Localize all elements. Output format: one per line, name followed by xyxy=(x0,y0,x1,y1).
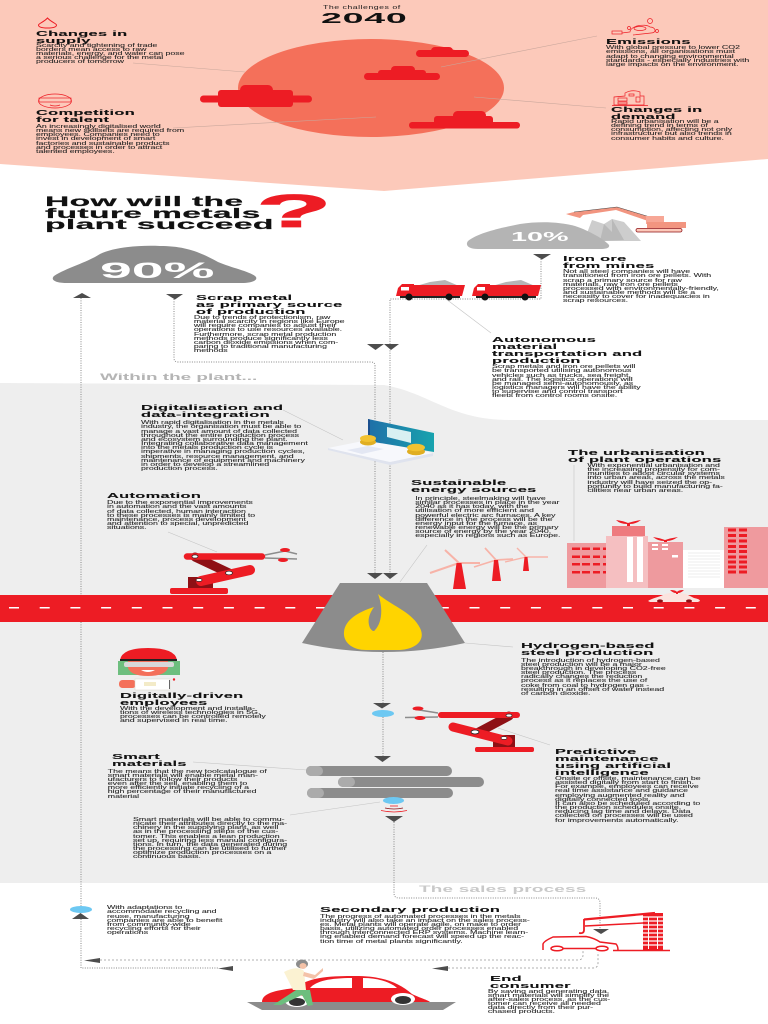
text block: digitalisation: maintenance of equipment and machinery xyxy=(141,458,305,464)
text block: scrap metal: carbon dioxide emissions when com- xyxy=(194,340,338,346)
text block: sustainable energy: utilisation of more efficient and xyxy=(415,508,534,514)
heading: how will the future metals plant succeed: How will the xyxy=(45,193,243,209)
text block: predictive maintenance: For example, employees can receive xyxy=(555,784,699,790)
illustration: furnace xyxy=(302,583,465,652)
text block: hydrogen: radically changes the reduction xyxy=(521,674,642,680)
text block: scrap metal: Due to trends of protectionism, raw xyxy=(194,315,330,321)
text block: autonomous transportation: be transported utilising autonomous xyxy=(492,368,631,374)
text block: digitalisation: Integrating collaborative data management xyxy=(141,441,308,447)
text block: changes in demand: consumer habits and culture. xyxy=(611,136,724,142)
text block: competition for talent xyxy=(36,108,184,155)
text block: automation: Automation xyxy=(107,490,201,500)
callout lines xyxy=(133,36,606,128)
text block: iron ore from mines: scrap a primary source for raw xyxy=(563,278,682,284)
text block: end consumer: after-sales process, as the cus- xyxy=(488,997,610,1003)
text block: changes in demand: demand xyxy=(611,112,676,120)
text block: hydrogen: The introduction of hydrogen-based xyxy=(521,658,660,664)
icon: blue disc three xyxy=(70,906,92,913)
text block: scrap metal: will require companies to adjust their xyxy=(194,323,336,329)
text block: sustainable energy: energy sources xyxy=(411,484,537,494)
text block: predictive maintenance xyxy=(555,746,701,824)
text block: sustainable energy: source of energy by the year 2040, xyxy=(415,529,551,535)
text block: hydrogen: steel production. The process xyxy=(521,670,636,676)
text block: autonomous transportation: Scrap metals and iron ore pellets will xyxy=(492,364,635,370)
text block: digitally-driven employees: employees xyxy=(120,698,208,706)
label: 90 percent: 90% xyxy=(100,258,215,283)
text block: iron ore from mines: materials, raw iron ore pellets xyxy=(563,282,678,288)
text block: secondary production: industry will also take an impact on the sales process- xyxy=(320,918,530,924)
text block: digitally-driven employees xyxy=(120,690,266,724)
text block: iron ore from mines xyxy=(563,254,719,304)
text block: predictive maintenance: real time assistance and guidance xyxy=(555,788,688,794)
text block: competition for talent: An increasingly digitalised world xyxy=(36,124,161,130)
icon: wind turbine large xyxy=(430,550,480,589)
chart: central sphere xyxy=(238,39,504,137)
text block: digitalisation: imperative in managing production cycles, xyxy=(141,449,305,455)
text block: changes in supply: Scarcity and tightening of trade xyxy=(36,43,157,49)
text block: automation: to these processes is mainly limited to xyxy=(107,513,255,519)
text block: digitalisation: With rapid digitalisation in the metals xyxy=(141,420,284,426)
title: 2040: 2040 xyxy=(321,10,407,27)
text block: competition for talent: employees. Companies need to xyxy=(36,132,160,138)
text block: urbanisation: industry will have seized the op- xyxy=(587,480,712,486)
text block: predictive maintenance: assisted digitally from start to finish. xyxy=(555,780,694,786)
text block: urbanisation: With exponential urbanisation and xyxy=(587,463,720,469)
text block: sustainable energy: energy input for the furnace, as xyxy=(415,521,537,527)
icon: rocks xyxy=(584,219,641,241)
text block: changes in supply: producers of tomorrow xyxy=(36,59,124,65)
text block: digitally-driven employees: tions of wireless technologies in 5G, xyxy=(120,710,260,716)
icon: cloud left xyxy=(200,85,312,107)
text block: changes in supply: a serious challenge for the metal xyxy=(36,55,163,61)
icon: robot arm right xyxy=(405,706,534,752)
icon: car outline xyxy=(543,936,618,951)
text block: hydrogen: coke from coal to hydrogen gas - xyxy=(521,683,649,689)
text block: hydrogen: steel production xyxy=(521,648,654,656)
text block: predictive maintenance: intelligence xyxy=(555,768,649,776)
text block: predictive maintenance: It can also be scheduled according to xyxy=(555,801,700,807)
text block: scrap metal: material scarcity in regions like Europe xyxy=(194,319,345,325)
text block: iron ore from mines: scrap resources. xyxy=(563,298,628,304)
heading: within the plant: Within the plant... xyxy=(100,372,257,382)
icon: flame xyxy=(344,594,422,650)
text block: emissions xyxy=(606,36,749,68)
text block: automation: and attention to special, unpredicted xyxy=(107,521,248,527)
text block: scrap metal: methods xyxy=(194,348,228,354)
text block: recycling: companies are able to benefit xyxy=(107,918,222,924)
text block: scrap metal: as primary source xyxy=(196,300,343,308)
icon: signal waves xyxy=(381,806,407,812)
panel: within the plant background xyxy=(0,383,768,883)
text block: secondary production: The progress of automated processes in the metals xyxy=(320,914,521,920)
text block: emissions: Emissions xyxy=(606,36,691,46)
text block: digitally-driven employees: processes can be controlled remotely xyxy=(120,714,266,720)
text block: digitalisation: throughout the entire production process xyxy=(141,433,299,439)
text block: urbanisation xyxy=(568,448,725,494)
text block: urbanisation: cilities near urban areas. xyxy=(587,488,683,494)
text block: autonomous transportation: production xyxy=(492,356,581,364)
text block: automation: Due to the exponential improvements xyxy=(107,500,253,506)
text block: competition for talent: and processes in order to attract xyxy=(36,145,162,151)
text block: secondary production: tion time of metal plants significantly. xyxy=(320,939,463,945)
text block: autonomous transportation xyxy=(492,334,642,399)
text block: iron ore from mines: transitioned from iron ore pellets. With xyxy=(563,273,711,279)
icon: car on road xyxy=(648,590,700,603)
text block: iron ore from mines: processed with environmentally-friendly, xyxy=(563,286,719,292)
icon: secondary production factory xyxy=(579,913,670,951)
text block: urbanisation: into urban areas, across the metals xyxy=(587,475,725,481)
text block: autonomous transportation: fleets from control rooms onsite. xyxy=(492,393,617,399)
text block: secondary production: ing enabled demand forecast will speed up the reac- xyxy=(320,934,524,940)
text block: urbanisation: munities to adopt circular systems xyxy=(587,471,720,477)
text block: digitally-driven employees: and supervised in real time. xyxy=(120,718,228,724)
text block: sustainable energy: In principle, steelmaking will have xyxy=(415,496,546,502)
text block: competition for talent: means new skillsets are required from xyxy=(36,128,184,134)
text block: competition for talent: Competition xyxy=(36,108,135,116)
text block: end consumer: data directly from their pur- xyxy=(488,1005,593,1011)
text block: emissions: standards - especially industries with xyxy=(606,58,749,64)
callout lines inside plant xyxy=(168,299,574,815)
text block: iron ore from mines: Not all steel companies will have xyxy=(563,269,690,275)
icon: question mark: ? xyxy=(256,185,332,237)
icon: cloud lower right xyxy=(409,111,520,128)
text block: sustainable energy: similar processes in place in the year xyxy=(415,500,560,506)
text block: end consumer: smart materials will simplify the xyxy=(488,993,609,999)
text block: changes in supply: materials, energy, and water can pose xyxy=(36,51,185,57)
text block: iron ore from mines: Iron ore xyxy=(563,254,627,262)
text block: digitalisation: data-integration xyxy=(141,410,270,418)
text block: recycling: recycling efforts for their xyxy=(107,926,201,932)
text block: scrap metal: paring to traditional manufacturing xyxy=(194,344,327,350)
icon: laptop xyxy=(328,419,434,465)
text block: scrap metal: of production xyxy=(196,306,306,316)
text block: competition for talent: invest in development of smart xyxy=(36,136,155,142)
arrows xyxy=(72,254,551,971)
text block: smart materials: high percentage of their manufactured xyxy=(108,789,257,795)
icon: cloud upper right xyxy=(416,47,469,57)
text block: smart materials communication: the processing can be utilised to further xyxy=(133,846,287,852)
text block: digitalisation: and ecosystem surrounding the plant. xyxy=(141,437,288,443)
text block: digitalisation: industry, the organisation must be able to xyxy=(141,424,301,430)
text block: autonomous transportation: transportation and xyxy=(492,348,642,358)
illustration: metal pipes xyxy=(306,766,484,798)
icon: truck one xyxy=(396,280,465,300)
text block: automation: maintenance, process development xyxy=(107,517,246,523)
text block: automation: of data collected, human interaction xyxy=(107,509,246,515)
text block: sustainable energy: especially in regions such as Europe. xyxy=(415,533,560,539)
text block: iron ore from mines: necessity to cover for inadequacies in xyxy=(563,294,710,300)
text block: sustainable energy: difference in the process will be the xyxy=(415,517,553,523)
title: challenges of: The challenges of xyxy=(323,5,401,11)
illustration: city buildings xyxy=(567,520,768,588)
text block: emissions: adapt to changing environmental xyxy=(606,54,734,60)
text block: hydrogen: resulting in an offset of water instead xyxy=(521,687,664,693)
icon: wind turbine small xyxy=(505,548,548,571)
text block: secondary production xyxy=(320,904,530,945)
text block: digitalisation xyxy=(141,402,308,472)
text block: autonomous transportation: Autonomous xyxy=(492,334,596,344)
text block: smart materials communication: tions. In turn, the data generated during xyxy=(133,842,287,848)
text block: scrap metal xyxy=(194,292,345,354)
text block: autonomous transportation: be managed semi-autonomously, as xyxy=(492,381,633,387)
text block: end consumer: By saving and generating data, xyxy=(488,989,609,995)
text block: recycling: accommodate recycling and xyxy=(107,909,217,915)
text block: autonomous transportation: material xyxy=(492,342,557,350)
text block: hydrogen: steel production will be a major xyxy=(521,662,642,668)
text block: end consumer: consumer xyxy=(490,980,571,990)
text block: smart materials: smart materials will enable metal man- xyxy=(108,773,258,779)
text block: recycling: With adaptations to xyxy=(107,905,182,911)
text block: recycling xyxy=(107,905,222,936)
text block: urbanisation: The urbanisation xyxy=(568,448,705,456)
heading: how will the future metals plant succeed: future metals xyxy=(45,205,261,221)
icon: blue disc two xyxy=(383,797,404,804)
text block: secondary production: through interconnected ERP systems. Machine learn- xyxy=(320,930,528,936)
text block: changes in demand: infrastructure but also trends in xyxy=(611,131,732,137)
text block: iron ore from mines: from mines xyxy=(563,260,655,270)
label: 10 percent: 10% xyxy=(511,230,569,244)
text block: digitally-driven employees: Digitally-driven xyxy=(120,690,243,700)
text block: autonomous transportation: logistics managers will have the ability xyxy=(492,385,641,391)
text block: urbanisation: the increasing propensity for com- xyxy=(587,467,720,473)
text block: predictive maintenance: collected on processes will be used xyxy=(555,813,693,819)
text block: digitalisation: production process. xyxy=(141,466,218,472)
text block: urbanisation: portunity to build manufacturing fa- xyxy=(587,484,723,490)
text block: predictive maintenance: maintenance xyxy=(555,754,659,762)
text block: competition for talent: factories and sustainable products xyxy=(36,141,170,147)
text block: secondary production: basis, utilizing automated order processes enabled xyxy=(320,926,518,932)
icon: helmet face xyxy=(38,94,72,108)
text block: smart materials communication xyxy=(133,817,287,860)
flow line: recycling up xyxy=(81,298,218,968)
text block: predictive maintenance: Onsite or offsite, maintenance can be xyxy=(555,776,701,782)
text block: digitally-driven employees: With the development and installa- xyxy=(120,706,255,712)
text block: hydrogen xyxy=(521,640,666,697)
icon: employee xyxy=(118,648,180,690)
text block: secondary production: es. Metal plants will operate agile, on make to order xyxy=(320,922,521,928)
text block: sustainable energy: renewable energy will be the primary xyxy=(415,525,559,531)
text block: competition for talent: talented employees. xyxy=(36,149,115,155)
text block: smart materials: even after the sell, enabling them to xyxy=(108,781,247,787)
text block: changes in supply: Changes in xyxy=(36,28,128,38)
text block: sustainable energy: 2040 as it has today, with the xyxy=(415,504,529,510)
text block: digitalisation: shipments, resource management, and xyxy=(141,454,294,460)
text block: autonomous transportation: vehicles such as trucks, sea freight, xyxy=(492,373,631,379)
text block: changes in supply: supply xyxy=(36,36,91,44)
text block: smart materials: more efficiently initiate recycling of a xyxy=(108,785,249,791)
text block: smart materials communication: optimize production processes on a xyxy=(133,850,271,856)
icon: water drop xyxy=(38,18,56,28)
text block: changes in supply: borders mean access to raw xyxy=(36,47,147,53)
text block: smart materials xyxy=(108,752,267,800)
text block: sustainable energy: powerful electric arc furnaces. A key xyxy=(415,513,556,519)
text block: hydrogen: Hydrogen-based xyxy=(521,640,655,650)
icon: cloud centre xyxy=(364,66,440,80)
icon: truck two xyxy=(472,280,541,300)
text block: automation: situations. xyxy=(107,525,147,531)
text block: sustainable energy: Sustainable xyxy=(411,478,506,486)
text block: smart materials communication: continuous basis. xyxy=(133,854,201,860)
illustration: red car xyxy=(247,976,456,1010)
text block: hydrogen: process as it replaces the use of xyxy=(521,678,647,684)
text block: smart materials: The means that the new toolcatalogue of xyxy=(108,769,267,775)
text block: smart materials communication: set up, requiring less manual configura- xyxy=(133,838,287,844)
text block: changes in demand: Rapid urbanisation will be a xyxy=(611,119,719,125)
heading: how will the future metals plant succeed: plant succeed xyxy=(45,216,274,232)
text block: smart materials: material xyxy=(108,794,139,800)
text block: hydrogen: of carbon dioxide. xyxy=(521,691,590,697)
text block: competition for talent: for talent xyxy=(36,114,109,124)
text block: secondary production: Secondary production xyxy=(320,904,500,914)
text block: recycling: reuse, manufacturing xyxy=(107,914,190,920)
text block: digitalisation: in order to develop a streamlined xyxy=(141,462,269,468)
text block: predictive maintenance: using artificial xyxy=(555,760,671,770)
text block: recycling: from community-wide xyxy=(107,922,191,928)
icon: ninety percent pile xyxy=(53,246,256,283)
icon: robot arm left xyxy=(170,548,297,594)
text block: scrap metal: Furthermore, scrap metal production xyxy=(194,332,336,338)
text block: predictive maintenance: the production schedules onsite, xyxy=(555,805,681,811)
icon: emissions xyxy=(612,18,658,35)
text block: recycling: operations xyxy=(107,930,148,936)
text block: scrap metal: Scrap metal xyxy=(196,292,292,302)
text block: smart materials communication: Smart materials will be able to commu- xyxy=(133,817,285,823)
icon: blue disc one xyxy=(372,710,394,717)
text block: predictive maintenance: digitally connected tools. xyxy=(555,797,651,803)
text block: smart materials communication: chinery in the supplying plant, as well xyxy=(133,825,278,831)
icon: ten percent pile xyxy=(467,222,609,249)
text block: predictive maintenance: employing augmented reality and xyxy=(555,793,685,799)
text block: smart materials: Smart xyxy=(112,752,160,760)
text block: smart materials: ufacturers to follow their products xyxy=(108,777,237,783)
flow line: sales return xyxy=(100,951,598,968)
text block: changes in demand: consumption, affecting not only xyxy=(611,127,732,133)
flow line: iron ore to plant xyxy=(390,259,541,573)
text block: scrap metal: operations to use resources available. xyxy=(194,327,342,333)
text block: end consumer: End xyxy=(490,974,522,982)
text block: predictive maintenance: Predictive xyxy=(555,746,637,756)
text block: smart materials communication: as in the processing steps of the cus- xyxy=(133,829,278,835)
icon: excavator xyxy=(566,207,686,232)
icon: demand buildings xyxy=(612,91,648,106)
text block: automation xyxy=(107,490,255,531)
illustration: road xyxy=(0,595,768,622)
text block: predictive maintenance: for improvements automatically. xyxy=(555,818,679,824)
flow line: scrap to plant xyxy=(174,299,375,573)
text block: hydrogen: breakthrough in developing CO2-free xyxy=(521,666,666,672)
text block: end consumer: chased products. xyxy=(488,1009,555,1015)
text block: digitalisation: into the metals production cycle is xyxy=(141,445,273,451)
icon: production arrow xyxy=(593,929,609,934)
text block: digitalisation: Digitalisation and xyxy=(141,402,283,412)
text block: smart materials communication: tomer. This enables a lean production xyxy=(133,834,280,840)
text block: autonomous transportation: to supervise and control transport xyxy=(492,389,623,395)
text block: end consumer: tomer can receive all needed xyxy=(488,1001,601,1007)
text block: end consumer xyxy=(488,974,610,1015)
icon: person with phone xyxy=(273,960,323,1006)
text block: changes in supply xyxy=(36,28,185,65)
text block: urbanisation: of plant operations xyxy=(568,454,722,464)
panel: top challenges background xyxy=(0,0,768,191)
text block: scrap metal: methods produce significantly less xyxy=(194,336,328,342)
text block: emissions: emissions, all organisations must xyxy=(606,49,735,55)
heading: how will the future metals plant succeed xyxy=(45,193,274,232)
text block: emissions: large impacts on the environment. xyxy=(606,62,739,68)
text block: changes in demand xyxy=(611,104,732,142)
heading: the sales process: The sales process xyxy=(419,884,586,894)
text block: digitalisation: manage a vast amount of data collected xyxy=(141,429,297,435)
text block: changes in demand: Changes in xyxy=(611,104,703,114)
flow line: central process xyxy=(383,652,600,929)
text block: smart materials communication: nicate their attributes directly to the ma- xyxy=(133,821,287,827)
icon: wind turbine medium xyxy=(474,548,513,581)
text block: sustainable energy xyxy=(411,478,560,539)
text block: autonomous transportation: and rail. The logistics operations will xyxy=(492,377,633,383)
text block: emissions: With global pressure to lower CO2 xyxy=(606,45,740,51)
text block: predictive maintenance: reducing lag time and delays. Data xyxy=(555,809,691,815)
text block: iron ore from mines: and sustainable methods will be a xyxy=(563,290,695,296)
text block: automation: in automation and the vast amounts xyxy=(107,504,246,510)
text block: changes in demand: defining trend in terms of xyxy=(611,123,708,129)
text block: smart materials: materials xyxy=(112,758,187,768)
